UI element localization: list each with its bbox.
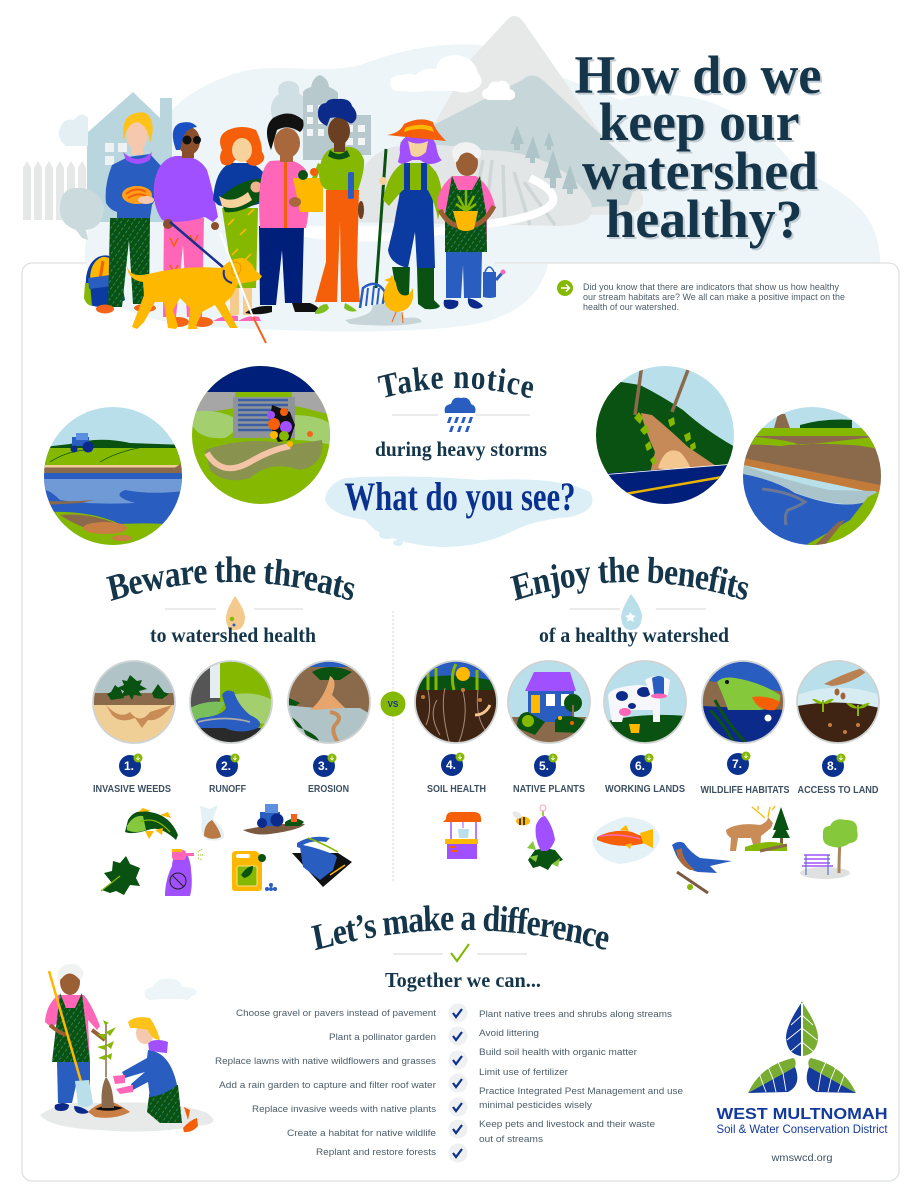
list: left actions: Plant a pollinator garden xyxy=(329,1032,436,1043)
number badge 4: 4. xyxy=(446,758,456,772)
person: woman in orange flares xyxy=(315,99,364,314)
icon: green fish xyxy=(125,808,178,840)
threat 3: erosion xyxy=(287,660,372,795)
title: watershed xyxy=(582,141,818,201)
benefit 4: soil health xyxy=(415,660,499,795)
list: left actions: Replant and restore forests xyxy=(316,1147,436,1158)
number badge 1: 1. xyxy=(124,759,134,773)
person: woman with baby xyxy=(213,127,273,321)
list: left actions: Replace lawns with native wildflowers and grasses xyxy=(215,1056,436,1067)
threat 3: erosion: EROSION xyxy=(308,784,349,795)
person: elder with shovel xyxy=(45,964,105,1114)
vs badge xyxy=(380,692,406,716)
benefit 4: soil health: SOIL HEALTH xyxy=(427,784,486,795)
number badge 5: 5. xyxy=(539,759,549,773)
icon: soil drop xyxy=(226,596,245,630)
threat 1: invasive weeds: INVASIVE WEEDS xyxy=(93,784,171,795)
number badge 6: 6. xyxy=(635,759,645,773)
benefit 8: access to land: ACCESS TO LAND xyxy=(798,785,878,796)
person: farmer in overalls xyxy=(379,119,446,309)
icon: trout in water xyxy=(592,817,660,864)
icon: pesticide spray bottle xyxy=(165,849,203,896)
logo: West Multnomah SWCD: WEST MULTNOMAH xyxy=(716,1106,888,1123)
benefit 6: working lands: WORKING LANDS xyxy=(605,784,685,795)
number badge 3: 3. xyxy=(318,759,328,773)
logo: West Multnomah SWCD xyxy=(716,1002,888,1164)
list: left actions: Choose gravel or pavers instead of pavement xyxy=(236,1008,436,1019)
heading: take notice: during heavy storms xyxy=(375,437,547,461)
title: How do we xyxy=(574,45,822,105)
scene: culvert with debris xyxy=(192,366,332,506)
icon: rain cloud xyxy=(445,398,476,432)
icon: elk and tree xyxy=(726,806,790,851)
callout: what do you see xyxy=(325,474,592,547)
list: left actions: Replace invasive weeds with native plants xyxy=(252,1104,436,1115)
guide dog xyxy=(127,258,262,329)
rocks and chicken xyxy=(345,275,422,326)
person: shopper with grocery bag xyxy=(245,113,323,314)
icon: pet waste bag xyxy=(200,805,224,841)
heading: beware the threats: Beware the threats xyxy=(106,556,354,601)
title xyxy=(574,45,822,249)
threat 2: runoff: RUNOFF xyxy=(209,784,246,795)
icon: bee and lupine xyxy=(511,805,563,870)
intro text xyxy=(557,280,845,313)
check mark column xyxy=(448,1004,468,1162)
icon: tractor on soil xyxy=(243,804,305,834)
benefit 6: working lands xyxy=(604,660,688,795)
person: hoodie with helmet xyxy=(96,112,161,314)
list: right actions xyxy=(479,1009,683,1145)
list: right actions: Limit use of fertilizer xyxy=(479,1067,569,1078)
scene: eroded stream bank xyxy=(743,407,883,545)
heading: beware the threats xyxy=(106,556,354,647)
benefit 5: native plants xyxy=(508,660,592,795)
landscape overlap on panel xyxy=(85,257,548,332)
number badge 2: 2. xyxy=(221,759,231,773)
list: left actions: Create a habitat for native wildlife xyxy=(287,1128,436,1139)
backpack xyxy=(84,255,125,307)
logo: West Multnomah SWCD: wmswcd.org xyxy=(770,1152,833,1164)
white cane xyxy=(220,233,266,343)
list: right actions: Plant native trees and shrubs along streams xyxy=(479,1009,672,1020)
number badge 8: 8. xyxy=(827,759,837,773)
icon: green arrow xyxy=(557,280,573,296)
main panel xyxy=(22,263,899,1181)
threat 1: invasive weeds xyxy=(92,660,176,795)
list: right actions: Build soil health with organic matter xyxy=(479,1047,638,1058)
logo leaves xyxy=(748,1002,856,1093)
logo: West Multnomah SWCD: Soil & Water Conservation District xyxy=(716,1122,888,1136)
benefit 8: access to land xyxy=(797,660,881,796)
person: kneeling planter xyxy=(113,1017,198,1132)
list: left actions xyxy=(215,1008,437,1158)
list: right actions: out of streams xyxy=(479,1134,543,1145)
heading: enjoy the benefits: Enjoy the benefits xyxy=(510,556,748,601)
heading: take notice: Take notice xyxy=(378,367,533,398)
scene: farm field runoff xyxy=(44,407,184,545)
intro text: Did you know that there are indicators that show us how healthy xyxy=(583,282,839,293)
list: right actions: minimal pesticides wisely xyxy=(479,1100,592,1111)
list: right actions: Avoid littering xyxy=(479,1028,539,1039)
benefit 5: native plants: NATIVE PLANTS xyxy=(513,784,585,795)
number badge 7: 7. xyxy=(732,757,742,771)
pitchfork xyxy=(360,149,386,308)
title: healthy? xyxy=(606,189,802,249)
benefit 7: wildlife habitats xyxy=(700,660,790,796)
person: elder with plant xyxy=(437,142,495,309)
group of people illustration xyxy=(84,99,506,343)
subheading: together we can: Together we can... xyxy=(385,968,541,992)
illustration: planting a tree xyxy=(40,964,214,1132)
icon: fertilizer jug xyxy=(232,851,277,891)
callout: what do you see: What do you see? xyxy=(344,474,576,519)
young tree in soil xyxy=(88,1020,130,1118)
list: right actions: Practice Integrated Pest Management and use xyxy=(479,1086,683,1097)
vs badge: VS xyxy=(388,700,399,709)
person: blind man with purple sweater xyxy=(154,122,224,327)
intro text: our stream habitats are? We all can make a positive impact on the xyxy=(583,292,845,303)
heading: enjoy the benefits xyxy=(510,556,748,647)
scene: landslide by road xyxy=(595,364,735,505)
icon: water well xyxy=(443,812,481,859)
intro text: health of our watershed. xyxy=(583,302,679,313)
benefit 7: wildlife habitats: WILDLIFE HABITATS xyxy=(700,785,790,796)
title: keep our xyxy=(598,92,800,152)
icon: check mark xyxy=(451,944,469,961)
heading: enjoy the benefits: of a healthy watershed xyxy=(539,623,729,647)
icon: ivy leaf xyxy=(101,856,140,895)
icon: polluted road runoff xyxy=(292,837,352,887)
background landscape xyxy=(23,16,880,263)
heading: beware the threats: to watershed health xyxy=(150,623,316,647)
list: left actions: Add a rain garden to capture and filter roof water xyxy=(219,1080,437,1091)
icon: water drop with star xyxy=(621,594,642,630)
list: right actions: Keep pets and livestock and their waste xyxy=(479,1119,655,1130)
watering can xyxy=(483,267,506,298)
icon: western bluebird xyxy=(672,842,732,893)
threat 2: runoff xyxy=(190,660,274,795)
heading: let's make a difference: Let’s make a difference xyxy=(310,905,608,950)
icon: park bench and tree xyxy=(800,819,858,879)
heading: take notice xyxy=(375,367,547,461)
